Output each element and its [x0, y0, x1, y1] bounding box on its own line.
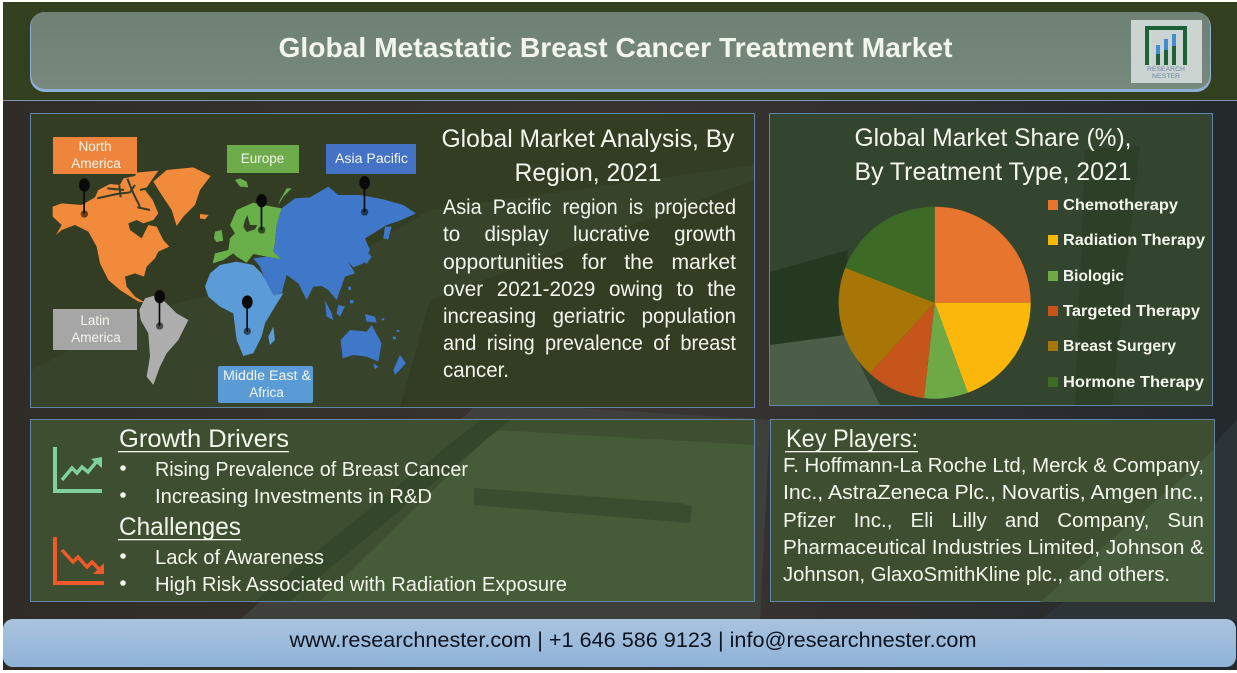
legend: biologic: Biologic: [1063, 268, 1124, 285]
pin: asia: [359, 176, 370, 216]
list: growth drivers: Increasing Investments in R&D: [155, 486, 432, 508]
key players text: F. Hoffmann-La Roche Ltd, Merck & Company,: [783, 455, 1204, 477]
region text: opportunities for the market: [443, 251, 736, 274]
heading: challenges: Challenges: [119, 513, 241, 541]
map: europe baltic: [243, 215, 257, 232]
legend: radiation: Radiation Therapy: [1063, 232, 1205, 249]
list: challenges: High Risk Associated with Radiation Exposure: [155, 574, 567, 596]
map: latin america: [139, 295, 188, 385]
heading: growth drivers: Growth Drivers: [119, 425, 289, 453]
heading: region analysis: [442, 125, 735, 187]
key players text: Pharmaceutical Industries Limited, Johnson &: [783, 537, 1205, 559]
legend: [1048, 197, 1205, 391]
logo: [1131, 20, 1202, 83]
key players text: Pfizer Inc., Eli Lilly and Company, Sun: [783, 510, 1204, 532]
label: middle east and africa: [218, 366, 313, 403]
region text: to display lucrative growth: [443, 223, 736, 246]
legend: targeted: Targeted Therapy: [1063, 303, 1200, 320]
heading: market share: By Treatment Type, 2021: [854, 158, 1132, 186]
panel: drivers and challenges: [30, 420, 754, 602]
region text: increasing geriatric population: [443, 305, 736, 328]
icon: growth chart: [55, 447, 102, 491]
region text: cancer.: [443, 359, 509, 382]
pin: north america: [79, 178, 90, 218]
heading: key players: Key Players:: [786, 425, 918, 453]
key players text: Inc., AstraZeneca Plc., Novartis, Amgen Inc.,: [783, 482, 1204, 504]
region text: Asia Pacific region is projected: [443, 196, 736, 219]
footer bar: [3, 619, 1236, 667]
list: growth drivers: [120, 459, 468, 508]
world map: [53, 167, 416, 385]
label: middle east and africa: Africa: [249, 385, 284, 400]
list: challenges: [120, 547, 567, 596]
pin: latin america: [154, 290, 165, 330]
legend: hormone: Hormone Therapy: [1063, 374, 1204, 391]
pie chart: [839, 207, 1031, 399]
logo: NESTER: [1152, 74, 1181, 80]
label: europe: Europe: [241, 151, 284, 166]
footer contact text: www.researchnester.com | +1 646 586 9123 | info@researchnester.com: [288, 629, 977, 652]
panel: region analysis: [30, 114, 754, 408]
list: growth drivers: Rising Prevalence of Breast Cancer: [155, 459, 468, 481]
logo: RESEARCH: [1147, 66, 1185, 73]
label: north america: America: [71, 156, 121, 171]
label: asia pacific: [326, 144, 416, 174]
map: europe: [213, 178, 292, 263]
label: asia pacific: Asia Pacific: [335, 151, 408, 166]
region text: and rising prevalence of breast: [443, 332, 736, 355]
map: africa: [205, 262, 283, 356]
heading: market share: Global Market Share (%),: [854, 124, 1132, 152]
label: europe: [227, 145, 299, 173]
label: north america: [53, 137, 137, 174]
map: north america: [53, 167, 211, 303]
list: challenges: Lack of Awareness: [155, 547, 324, 569]
label: north america: North: [78, 139, 112, 154]
legend: surgery: Breast Surgery: [1063, 338, 1176, 355]
panel: key players: [770, 420, 1214, 602]
label: latin america: Latin: [80, 313, 110, 328]
heading: region analysis: Global Market Analysis, By: [442, 125, 735, 153]
label: middle east and africa: Middle East &: [223, 368, 311, 383]
key players text: Johnson, GlaxoSmithKline plc., and others.: [783, 564, 1170, 586]
region text: [443, 196, 736, 382]
map: asia pacific: [253, 187, 416, 375]
legend: chemotherapy: Chemotherapy: [1063, 197, 1178, 214]
icon: decline chart: [55, 537, 104, 583]
panel: market share: [770, 114, 1212, 406]
label: latin america: [53, 309, 137, 350]
key players text: [783, 455, 1205, 586]
title: Global Metastatic Breast Cancer Treatment Market: [278, 32, 952, 63]
heading: market share: [854, 124, 1132, 186]
pin: africa: [242, 295, 253, 335]
label: latin america: America: [71, 330, 121, 345]
heading: region analysis: Region, 2021: [514, 159, 662, 187]
header bar: [30, 12, 1211, 92]
region text: over 2021-2029 owing to the: [443, 278, 736, 301]
pin: europe: [256, 194, 267, 234]
